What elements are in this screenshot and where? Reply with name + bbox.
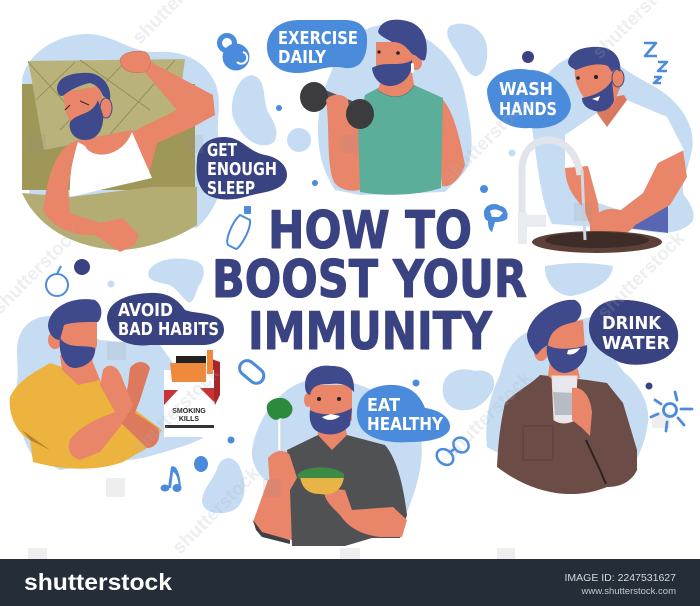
watermarks: shutterstock [594,228,689,324]
hair [527,300,581,355]
speech bubble: exercise daily: EXERCISE [278,29,358,49]
sink [532,231,662,253]
face [376,42,416,78]
hair [57,73,110,100]
watermarks: shutterstock [439,93,534,189]
background blob [318,24,472,195]
face [61,320,97,362]
fork and broccoli [267,398,293,450]
background blob [486,317,648,487]
left forearm [565,163,600,225]
face [310,385,352,432]
speech bubble: eat healthy: HEALTHY [367,415,443,435]
image id: IMAGE ID: 2247531627 [564,572,676,584]
hand [572,388,592,436]
hands [590,209,635,238]
background blob [14,316,203,470]
mattress [22,84,195,190]
speech bubble: avoid bad habits: BAD HABITS [118,320,219,340]
speech bubble: get enough sleep [197,137,287,199]
panel: drink water [486,300,648,494]
speech bubble: wash hands: HANDS [499,100,557,120]
speech bubble: drink water: DRINK [602,314,662,334]
fist [120,51,150,73]
speech bubble: wash hands [487,69,571,128]
glass [552,376,577,423]
icon: small dumbbell [434,434,472,468]
shirt [10,363,162,469]
website: www.shutterstock.com [580,586,676,597]
neck [548,360,580,385]
speech bubble: drink water [589,300,678,365]
beard [372,60,412,86]
pillow [28,59,185,150]
beard [582,80,614,112]
face [63,86,105,132]
background blob [22,34,223,228]
chest [70,130,150,178]
background blob [530,54,694,233]
title: HOW TO [268,201,472,261]
speech bubble: eat healthy [357,385,450,442]
icon: kettlebell [220,36,250,70]
tank top [70,132,152,197]
speech bubble: drink water: WATER [602,334,671,354]
t-shirt [565,100,684,210]
background blob [252,380,422,512]
panel: wash hands [518,47,694,253]
panel: exercise daily [300,20,472,195]
face [575,60,620,108]
hand [268,451,297,490]
neck [596,95,627,127]
speech bubble: avoid bad habits: AVOID [118,301,173,321]
hair [568,47,620,72]
beard [70,100,103,140]
panel: avoid bad habits [10,299,203,470]
front hand and forearm [69,366,133,460]
footer bar [0,559,700,606]
speech bubble: exercise daily [267,20,367,73]
beard [60,338,95,368]
raised arm [326,95,360,191]
panel: get enough sleep [22,34,223,252]
right arm [438,98,465,186]
vest [357,85,443,195]
icon: water bottle [227,206,251,249]
back hand and forearm [120,362,159,448]
speech bubble: get enough sleep: GET [207,141,237,161]
title [212,201,527,362]
ear [48,331,62,349]
right arm [606,150,687,232]
icon: pill [237,358,267,386]
hair [48,299,101,340]
shirt [287,435,407,546]
neck [60,355,100,385]
title: IMMUNITY [248,302,493,362]
salad bowl [297,467,344,494]
right arm [324,488,407,537]
beard [310,408,352,434]
ear [534,343,548,361]
speech bubble: eat healthy: EAT [367,396,400,416]
neck [317,425,347,450]
ear [304,393,312,407]
speech bubble: wash hands: WASH [499,80,553,100]
icon: music note [160,466,182,492]
lower arm and hand [43,140,139,252]
beard [547,345,587,373]
pack label: SMOKING [172,408,206,415]
face [547,320,585,368]
faucet [518,140,585,244]
hair [305,366,354,395]
speech bubble: get enough sleep: ENOUGH [207,160,277,180]
speech bubble: get enough sleep: SLEEP [207,179,255,199]
title: BOOST YOUR [212,250,527,310]
watermarks: shutterstock [169,463,264,559]
decorative blobs and dots [74,24,652,513]
neck [378,72,414,96]
watermarks: shutterstock [441,368,536,464]
shirt [497,375,637,494]
pants [628,206,668,233]
left arm [253,480,292,540]
icon: cloud of soap [484,204,508,232]
watermarks: shutterstock [129,363,224,459]
icon: cigarette pack [164,350,220,437]
icon: sun [651,392,692,431]
icon: cigarette pack: KILLS [179,416,199,423]
speech bubble: exercise daily: DAILY [278,48,326,68]
hair [378,20,427,61]
dumbbell back plate and handle [300,82,355,112]
ear [612,69,624,87]
ear [410,56,422,70]
blanket [22,187,197,250]
speech bubble: avoid bad habits [107,293,224,345]
ear [100,98,112,118]
icon: zzz [644,43,667,83]
panel: eat healthy [252,366,422,546]
dumbbell front plate [346,99,374,129]
icon: apple [46,266,68,296]
footer logo: shutterstock [24,569,172,595]
arm raised [132,60,215,178]
